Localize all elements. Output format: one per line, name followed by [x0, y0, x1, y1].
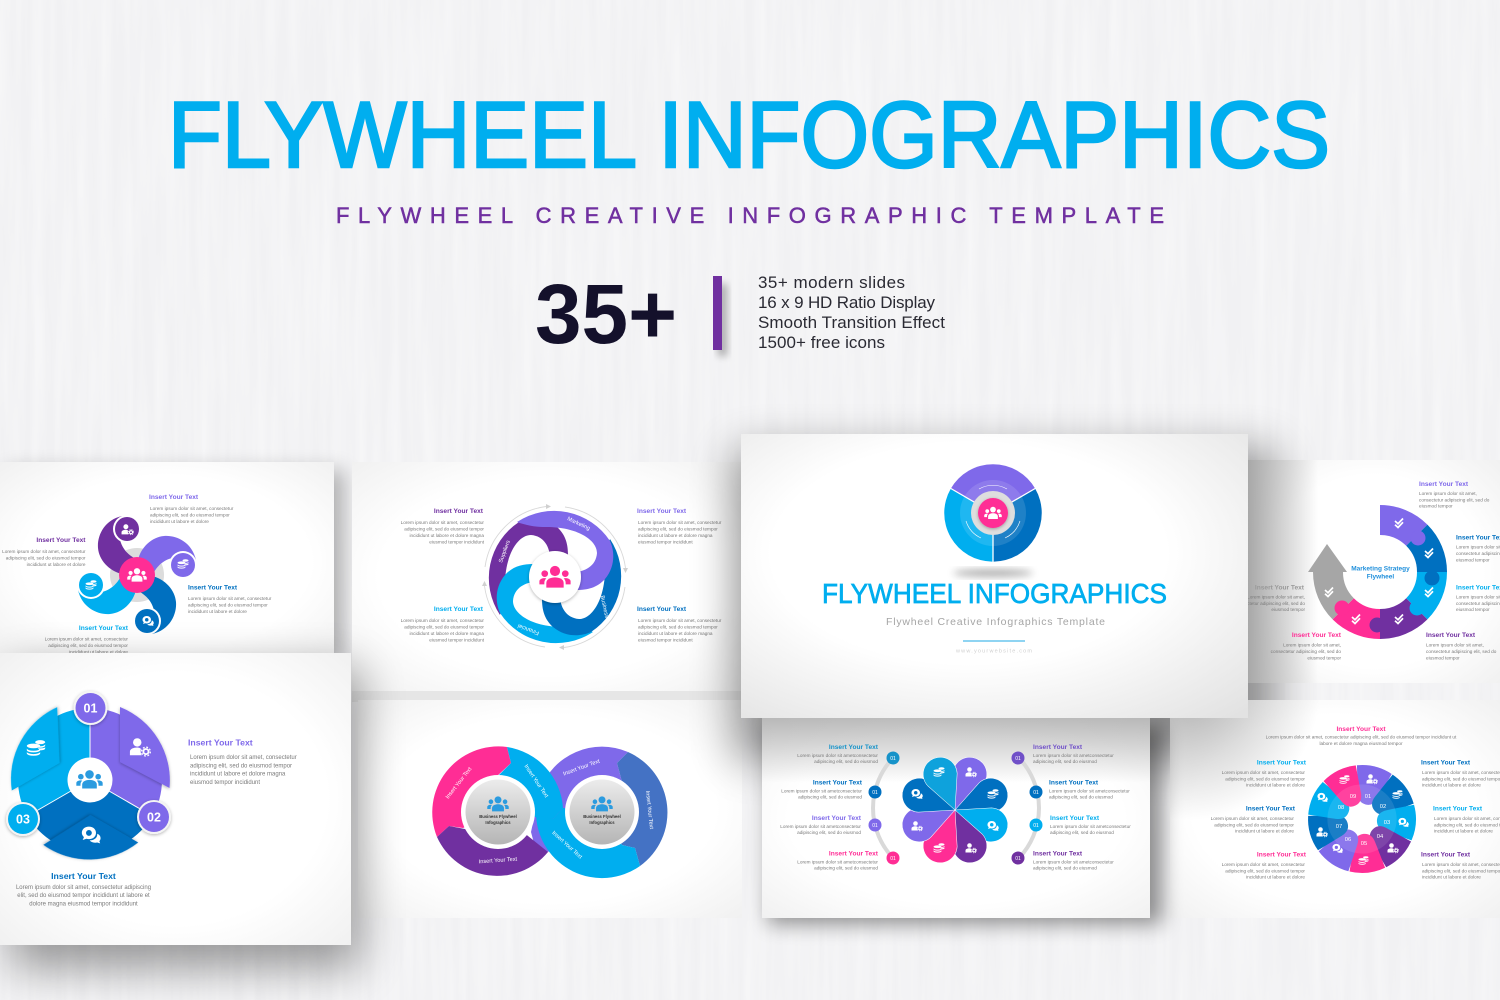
text block: right: Lorem ipsum dolor sit amet, consectetur [190, 755, 297, 761]
text block: left 1: adipiscing elit, sed do eiusmod [814, 759, 878, 764]
text block: top: labore et dolore magna eiusmod tempor [1319, 741, 1403, 746]
label 4: eiusmod tempor [1426, 656, 1460, 660]
text block: right 1: Insert Your Text [1421, 760, 1471, 766]
text block: top right: incididunt ut labore et dolore magna [638, 533, 713, 538]
big number: 35+ [535, 267, 677, 361]
text block: left 2: Lorem ipsum dolor sit ametconsectetur [781, 788, 862, 794]
text block: left 3: incididunt ut labore et dolore [1246, 874, 1305, 880]
text block: bottom: Insert Your Text [79, 625, 129, 632]
nine segment wheel: 01 [1365, 794, 1371, 800]
number badges: 01 [1033, 790, 1039, 796]
text block: left 4: Lorem ipsum dolor sit ametconsectetur [797, 860, 878, 864]
text block: left 2 [1211, 806, 1296, 834]
text block: right 3: Insert Your Text [1421, 852, 1471, 858]
label 2 [1456, 534, 1500, 562]
nine segment wheel: 07 [1336, 824, 1342, 830]
infinity diagram: Insert Your Text [550, 830, 583, 861]
hero url: www.yourwebsite.com [955, 648, 1032, 654]
hero slide shadow [735, 450, 1275, 760]
feature list: Smooth Transition Effect [758, 313, 945, 332]
text block: bottom right: Insert Your Text [637, 606, 687, 613]
flower diagram [897, 752, 1013, 868]
ring diagram: Business [599, 595, 609, 619]
badge 03 [6, 802, 40, 836]
text block: left 3: Lorem ipsum dolor sit amet, consectetur [1222, 862, 1305, 867]
text block: bottom: Lorem ipsum dolor sit amet, consectetur [45, 636, 128, 642]
text block: bottom: Lorem ipsum dolor sit amet, consectetur adipiscing [16, 885, 151, 891]
text block: bottom left: incididunt ut labore et dolore magna [409, 631, 484, 636]
text block: top left: eiusmod tempor incididunt [429, 540, 485, 544]
text block: right 1: Insert Your Text [1033, 744, 1083, 751]
text block: right: adipiscing elit, sed do eiusmod tempor [190, 764, 292, 770]
text block: left 3: adipiscing elit, sed do eiusmod [797, 830, 861, 835]
text block: left 2: Insert Your Text [1246, 806, 1296, 812]
text block: bottom [45, 625, 129, 654]
ring centre label: Flywheel [1367, 574, 1394, 580]
infinity diagram: Insert Your Text [523, 764, 549, 799]
text block: right 1: Lorem ipsum dolor sit ametconsectetur [1033, 753, 1114, 758]
orbit arrows [482, 504, 628, 650]
text block: right [188, 584, 272, 614]
feature list: 1500+ free icons [758, 333, 885, 352]
text block: left: Insert Your Text [36, 537, 86, 544]
title: FLYWHEEL INFOGRAPHICS [168, 82, 1330, 187]
text block: left 2: Lorem ipsum dolor sit amet, consectetur [1211, 816, 1294, 821]
text block: left 1: Lorem ipsum dolor sit amet, consectetur [1222, 770, 1305, 775]
text block: left 1 [1222, 760, 1307, 788]
label 4: consectetur adipiscing elit, sed do [1426, 649, 1497, 654]
text block: left 1: incididunt ut labore et dolore [1246, 782, 1305, 788]
text block: left 2: incididunt ut labore et dolore [1235, 828, 1294, 834]
nine segment wheel: 08 [1338, 805, 1344, 811]
label 6: consectetur adipiscing elit, sed do [1235, 601, 1305, 606]
hero subheading: Flywheel Creative Infographics Template [886, 616, 1105, 628]
label 6: Lorem ipsum dolor sit amet, [1247, 594, 1305, 600]
text block: bottom: elit, sed do eiusmod tempor incididunt ut labore et [17, 893, 150, 899]
text block: right 2: adipiscing elit, sed do eiusmod [1049, 794, 1113, 800]
text block: left: adipiscing elit, sed do eiusmod tempor [6, 556, 86, 560]
label 2: eiusmod tempor [1456, 558, 1490, 562]
text block: left 3: adipiscing elit, sed do eiusmod tempor [1225, 868, 1305, 874]
nine segment wheel: 09 [1350, 794, 1356, 800]
text block: bottom right: eiusmod tempor incididunt [638, 638, 693, 642]
text blocks [1235, 481, 1500, 660]
badge 03: 03 [16, 812, 30, 826]
text block: right 4: Lorem ipsum dolor sit ametconsectetur [1033, 860, 1114, 864]
three step wheel [0, 700, 170, 886]
label 3 [1456, 584, 1500, 612]
panel: puzzle arrow slide [1235, 460, 1500, 683]
text block: right 2: Insert Your Text [1049, 780, 1099, 786]
badge 01 [74, 691, 108, 725]
text block: left 4: Insert Your Text [829, 850, 879, 858]
number badges: 01 [890, 856, 896, 862]
text block: left 1: Insert Your Text [829, 744, 879, 751]
text block: right 4: adipiscing elit, sed do eiusmod [1033, 866, 1097, 870]
text block: right 3 [1421, 852, 1500, 880]
text block: top: adipiscing elit, sed do eiusmod tempor [150, 512, 230, 518]
hub: left: Infographics [485, 820, 511, 825]
text block: right: Insert Your Text [188, 584, 238, 592]
label 1: Lorem ipsum dolor sit amet, [1419, 491, 1477, 496]
ring diagram: Financial [517, 622, 540, 636]
side arcs [873, 758, 1039, 858]
text block: bottom: dolore magna eiusmod tempor incididunt [29, 902, 138, 908]
number badges [868, 752, 1042, 864]
text block: right 3: Lorem ipsum dolor sit ametconsectetur [1050, 824, 1131, 829]
text block: right 1 [1033, 744, 1114, 764]
text block: right 1 [1421, 760, 1500, 788]
text block: top [149, 494, 234, 524]
text block: left 3 [1222, 852, 1307, 880]
hub: left [461, 775, 535, 849]
text block: left 1: Lorem ipsum dolor sit ametconsectetur [797, 753, 878, 758]
infinity diagram: Insert Your Text [563, 759, 601, 777]
ring diagram: Suppliers [498, 539, 512, 564]
text block: top right: eiusmod tempor incididunt [638, 540, 693, 544]
text block: left 3: Lorem ipsum dolor sit ametconsectetur [780, 824, 861, 829]
text block: bottom left: adipiscing elit, sed do eiusmod tempor [404, 624, 484, 630]
label 1 [1419, 481, 1490, 508]
ring diagram: Marketing [566, 516, 591, 532]
panel: infinity slide [358, 700, 742, 918]
text block: right 2 [1433, 806, 1500, 834]
text block: right: Insert Your Text [188, 738, 253, 748]
text block: right 3 [1050, 815, 1131, 835]
label 4: Insert Your Text [1426, 632, 1476, 639]
text block: top: Lorem ipsum dolor sit amet, consectetur [150, 506, 234, 511]
text block: right: Lorem ipsum dolor sit amet, consectetur [188, 596, 272, 601]
nine segment wheel: 05 [1361, 841, 1367, 847]
text block: bottom right [637, 606, 722, 642]
text block: top left: Lorem ipsum dolor sit amet, consectetur [401, 520, 484, 525]
infinity diagram: Insert Your Text [445, 766, 474, 800]
text block: top left: Insert Your Text [434, 508, 484, 515]
hub: right: Infographics [589, 820, 615, 825]
text block: right [188, 738, 297, 786]
text block: top: incididunt ut labore et dolore [150, 519, 209, 524]
hero wheel [944, 464, 1042, 562]
text block: left: incididunt ut labore et dolore [27, 562, 86, 567]
text block: right 2: incididunt ut labore et dolore [1434, 828, 1493, 834]
hub: right [565, 775, 639, 849]
label 5: Insert Your Text [1292, 632, 1342, 639]
text block: left 2: adipiscing elit, sed do eiusmod tempor [1214, 822, 1294, 828]
badge 02 [137, 800, 171, 834]
text block: left 1 [797, 744, 879, 764]
label 5: eiusmod tempor [1307, 656, 1341, 660]
number badges: 01 [872, 790, 878, 796]
nine segment wheel: 02 [1380, 804, 1386, 810]
text block: bottom right: adipiscing elit, sed do eiusmod tempor [638, 624, 718, 630]
text block: left 3 [780, 815, 862, 835]
text block: right 1: adipiscing elit, sed do eiusmod [1033, 759, 1097, 764]
label 4: Lorem ipsum dolor sit amet, [1426, 642, 1484, 648]
wheel shadow [953, 570, 1033, 576]
label 6: Insert Your Text [1255, 584, 1305, 592]
text block: bottom left: eiusmod tempor incididunt [429, 638, 485, 642]
text block: top left [401, 508, 485, 544]
infinity diagram: Insert Your Text [479, 857, 518, 865]
swirl diagram [77, 515, 197, 635]
panel: nine segment wheel slide [1170, 700, 1500, 918]
hub: right: Business Flywheel [583, 814, 621, 819]
badge 02: 02 [147, 810, 161, 824]
text block: bottom right: incididunt ut labore et dolore magna [638, 631, 713, 636]
text block: bottom left: Lorem ipsum dolor sit amet, consectetur [401, 618, 484, 623]
text block: right 4 [1033, 850, 1114, 870]
text block: right 2: Insert Your Text [1433, 806, 1483, 812]
text block: top: Insert Your Text [149, 494, 199, 501]
label 5 [1271, 632, 1342, 660]
panel: interlocked ring slide [352, 462, 744, 691]
text block: left 3: Insert Your Text [1257, 852, 1307, 858]
gap shade between slides [352, 688, 744, 702]
text block: right: eiusmod tempor incididunt [190, 780, 260, 786]
subtitle: FLYWHEEL CREATIVE INFOGRAPHIC TEMPLATE [336, 203, 1164, 228]
feature list: 35+ modern slides [758, 273, 905, 292]
infinity diagram: Insert Your Text [644, 790, 654, 830]
text block: top right [637, 508, 722, 544]
purple divider bar [713, 276, 727, 356]
text block: left [2, 537, 86, 567]
text block: top left: adipiscing elit, sed do eiusmod tempor [404, 526, 484, 532]
nine segment wheel [1305, 762, 1417, 875]
feature list: 16 x 9 HD Ratio Display [758, 293, 936, 312]
text block: bottom left: Insert Your Text [434, 606, 484, 613]
text block: right: incididunt ut labore et dolore magna [190, 772, 286, 778]
text block: left: Lorem ipsum dolor sit amet, consectetur [2, 549, 86, 554]
label 5: consectetur adipiscing elit, sed do [1271, 649, 1341, 654]
nine segment wheel: 04 [1377, 834, 1384, 840]
label 4 [1426, 632, 1497, 660]
number badges: 01 [872, 823, 878, 829]
text block: left 1: Insert Your Text [1257, 760, 1307, 766]
text block: right: adipiscing elit, sed do eiusmod tempor [188, 602, 268, 608]
text block: right 2: Lorem ipsum dolor sit ametconsectetur [1049, 788, 1130, 794]
number badges: 01 [1015, 856, 1021, 862]
text block: right 1: adipiscing elit, sed do eiusmod tempor [1422, 776, 1500, 782]
ring centre label: Marketing Strategy [1351, 566, 1410, 572]
text block: right 1: incididunt ut labore et dolore [1422, 782, 1481, 788]
badge 01: 01 [84, 702, 97, 716]
text block: bottom right: Lorem ipsum dolor sit amet, consectetur [638, 618, 722, 623]
text block: right 3: incididunt ut labore et dolore [1422, 874, 1481, 880]
text block: left 2: Insert Your Text [813, 780, 863, 786]
flower icons [912, 767, 999, 853]
text block: left 1: adipiscing elit, sed do eiusmod tempor [1225, 776, 1305, 782]
text block: right 4: Insert Your Text [1033, 850, 1083, 858]
label 6: eiusmod tempor [1271, 607, 1305, 612]
panel: swirl slide [0, 462, 344, 662]
panel: three step wheel slide [0, 653, 360, 968]
text block: bottom [16, 871, 151, 908]
text block: left 4 [797, 850, 879, 870]
text block: right: incididunt ut labore et dolore [188, 609, 247, 614]
text block: bottom: Insert Your Text [51, 871, 116, 881]
text block: right 3: adipiscing elit, sed do eiusmod tempor [1422, 868, 1500, 874]
label 6 [1248, 585, 1305, 612]
label 3: eiusmod tempor [1456, 607, 1490, 612]
number badges: 01 [890, 756, 896, 762]
text block: top right: Lorem ipsum dolor sit amet, consectetur [638, 520, 722, 525]
text block: left 2: adipiscing elit, sed do eiusmod [798, 794, 862, 800]
text block: top right: adipiscing elit, sed do eiusmod tempor [638, 526, 718, 532]
number badges: 01 [1015, 756, 1021, 762]
text block: left 2 [781, 780, 863, 800]
ring diagram [482, 504, 628, 650]
infinity diagram [432, 746, 667, 878]
text block: top [1266, 726, 1457, 746]
hub: left: Business Flywheel [479, 814, 517, 819]
hero heading: FLYWHEEL INFOGRAPHICS [822, 578, 1167, 609]
text block: right 3: Insert Your Text [1050, 815, 1100, 822]
panel: hero slide [741, 434, 1248, 718]
text block: right 2 [1049, 780, 1130, 800]
text block: top left: incididunt ut labore et dolore magna [409, 533, 484, 538]
hero rule [963, 640, 1025, 642]
text block: bottom: incididunt ut labore et dolore [69, 650, 128, 654]
text block: left 4: adipiscing elit, sed do eiusmod [814, 866, 878, 870]
puzzle ring [1308, 505, 1447, 639]
nine segment wheel: 06 [1345, 837, 1351, 843]
number badges: 01 [1033, 823, 1039, 829]
text block: top right: Insert Your Text [637, 508, 687, 515]
text block: bottom: adipiscing elit, sed do eiusmod tempor [48, 643, 128, 648]
text block: top: Insert Your Text [1336, 726, 1386, 733]
label 1: Insert Your Text [1419, 481, 1469, 488]
text block: top: Lorem ipsum dolor sit amet, consectetur adipiscing elit, sed do eiusmod tempor incididunt ut [1266, 734, 1457, 740]
label 1: eiusmod tempor [1419, 504, 1453, 508]
label 5: Lorem ipsum dolor sit amet, [1283, 642, 1341, 648]
nine segment wheel: 03 [1384, 820, 1390, 826]
label 1: consectetur adipiscing elit, sed do [1419, 498, 1490, 502]
panel: petal flower slide [762, 718, 1162, 924]
text block: left 3: Insert Your Text [812, 815, 862, 822]
text block: bottom left [401, 606, 485, 642]
text block: right 3: adipiscing elit, sed do eiusmod [1050, 830, 1114, 835]
